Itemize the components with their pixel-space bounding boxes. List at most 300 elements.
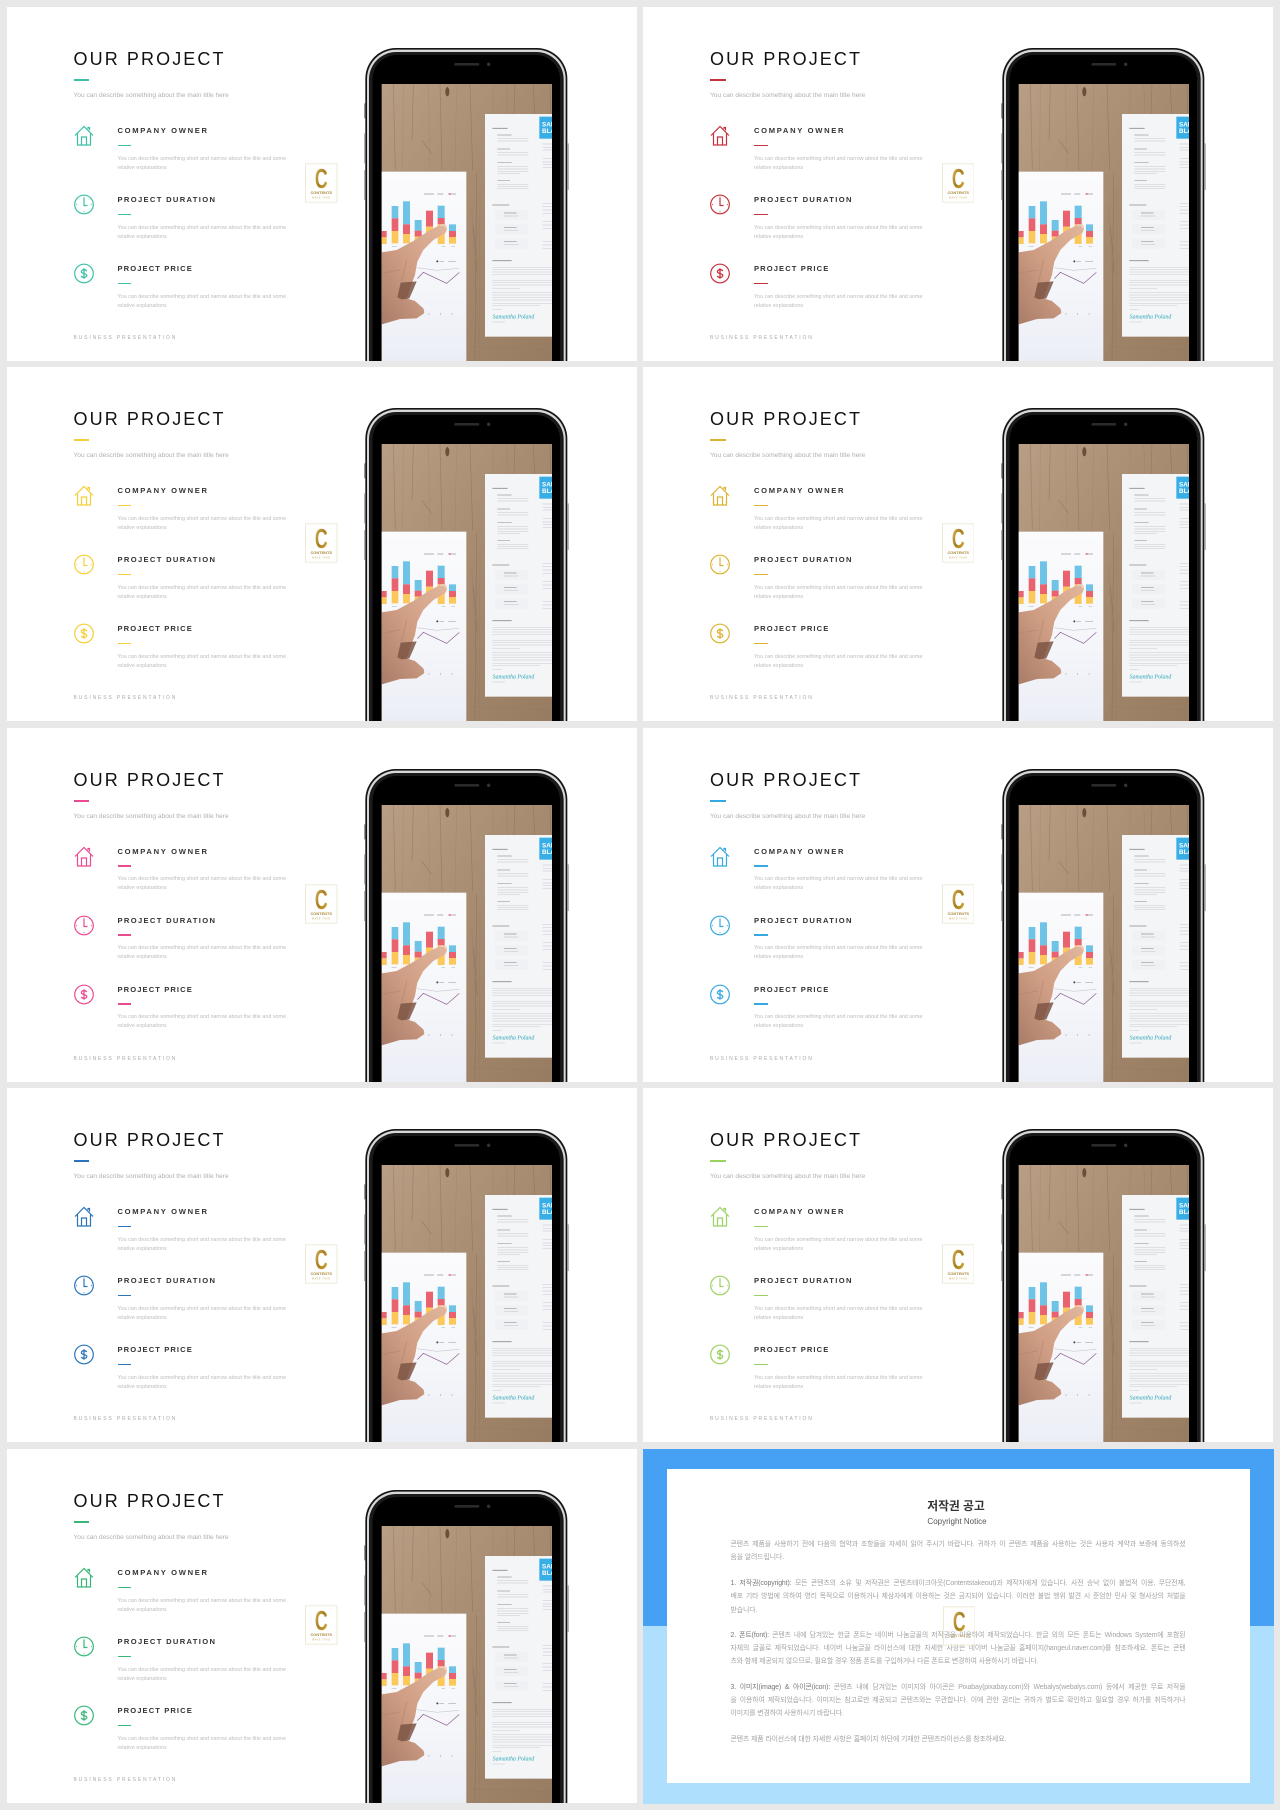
panel: sky blue slide [643,728,1273,1082]
description: You can describe something short and narrow about the title and some [118,224,286,230]
footer label: BUSINESS PRESENTATION [74,695,177,701]
description: You can describe something short and narrow about the title and some [118,1374,286,1380]
logo: C [951,1244,964,1275]
phone with photo: BLA [1178,488,1192,495]
underline [118,144,131,146]
notice title: 저작권 공고 [927,1499,985,1513]
underline [118,1586,131,1588]
logo: CONTENTS [310,1632,332,1637]
logo: CONTENTS [310,550,332,555]
description: relative explanations [754,165,803,171]
underline [118,1294,131,1296]
description: You can describe something short and narrow about the title and some [118,945,286,951]
footer label: BUSINESS PRESENTATION [710,695,814,701]
description: relative explanations [118,885,167,891]
heading: COMPANY OWNER [118,1568,209,1577]
icon: house [710,846,730,866]
icon: house [710,485,730,506]
phone with photo: Samantha Poland [1129,1395,1171,1401]
description: relative explanations [118,594,167,600]
description [118,1374,286,1392]
heading: PROJECT DURATION [118,195,216,204]
underline [118,1364,131,1365]
description: You can describe something short and narrow about the title and some [754,876,923,882]
phone with photo [996,40,1216,361]
icon: clock [74,1636,94,1657]
phone with photo: SAM [1178,481,1193,488]
description: relative explanations [118,303,167,309]
logo: C [315,1244,328,1275]
underline [118,504,131,506]
logo: C [315,523,328,554]
logo: CONTENTS [947,550,969,555]
phone with photo: BLA [542,128,555,135]
subtitle: You can describe something about the main title here [74,92,229,99]
description: You can describe something short and narrow about the title and some [754,945,923,951]
underline [754,1226,768,1227]
item: company owner [74,485,298,545]
section 3: image and icon: 3. 이미지(image) & 아이콘(icon): 콘텐츠 내에 담겨있는 이미지와 아이콘은 Pixabay(pixabay.com)와 Webalys(webalys.com) 등에서 제공한 무료 저작물 [730,1684,1186,1691]
underline [118,934,131,936]
logo: MAKE TAKE [312,1638,331,1641]
description [118,875,286,893]
title: OUR PROJECT [74,409,226,429]
underline [118,642,131,644]
phone with photo: BLA [1178,1209,1192,1216]
heading: COMPANY OWNER [118,486,209,495]
accent bar [710,1160,726,1162]
icon: clock [74,1275,94,1296]
accent bar [710,439,726,441]
description: You can describe something short and narrow about the title and some [118,1598,286,1604]
heading: PROJECT PRICE [118,1706,193,1715]
description [754,224,923,242]
heading: COMPANY OWNER [754,126,845,135]
footer label: BUSINESS PRESENTATION [74,1777,177,1783]
description: You can describe something short and narrow about the title and some [118,584,286,590]
heading: PROJECT DURATION [118,1276,216,1285]
description: You can describe something short and narrow about the title and some [118,654,286,660]
description [118,154,286,173]
icon: house [74,1206,94,1227]
item: project price [74,1705,298,1765]
logo [942,523,974,563]
description [754,652,923,671]
description: relative explanations [754,663,803,669]
phone with photo: BLA [542,1570,555,1577]
underline [754,1003,768,1004]
heading: COMPANY OWNER [754,1207,845,1216]
underline [118,214,131,215]
description [118,652,286,671]
description [118,1596,286,1615]
description: You can describe something short and narrow about the title and some [754,294,923,300]
logo [305,523,338,563]
logo: C [315,1605,328,1636]
description: relative explanations [754,594,803,600]
description: You can describe something short and narrow about the title and some [754,1236,923,1242]
description: You can describe something short and narrow about the title and some [118,876,286,882]
icon: dollar coin [74,263,94,284]
panel: navy blue slide [6,1088,636,1442]
item: company owner [74,1206,298,1266]
panel: red slide [643,7,1273,361]
description [754,1304,923,1323]
description: relative explanations [754,1246,803,1252]
underline [118,865,131,866]
description: You can describe something short and narrow about the title and some [118,1736,286,1742]
heading: PROJECT DURATION [754,195,853,204]
panel: copyright notice [643,1449,1274,1804]
description: relative explanations [118,525,167,531]
description [118,514,286,533]
icon: house [710,125,730,146]
item: company owner [710,485,935,545]
description: You can describe something short and narrow about the title and some [754,1306,923,1312]
phone with photo: Samantha Poland [493,1756,534,1762]
description: You can describe something short and narrow about the title and some [118,156,286,162]
accent bar [74,1521,89,1523]
description [754,1236,923,1254]
phone with photo [996,760,1216,1082]
footer label: BUSINESS PRESENTATION [710,1056,814,1062]
panel: green slide [6,1449,636,1803]
underline [754,504,768,506]
icon: clock [710,194,730,215]
subtitle: You can describe something about the main title here [710,452,865,459]
phone with photo: BLA [542,848,555,856]
logo [942,163,974,203]
logo: MAKE TAKE [948,556,967,559]
phone with photo: SAM [1178,842,1193,849]
title: OUR PROJECT [74,49,226,69]
closing line: 콘텐츠 제품 라이선스에 대한 자세한 사항은 홈페이지 하단에 기재한 콘텐츠라이선스를 참조하세요. [730,1736,1006,1743]
description: You can describe something short and narrow about the title and some [118,294,286,300]
icon: dollar coin [710,263,730,284]
heading: COMPANY OWNER [754,486,845,495]
heading: PROJECT PRICE [118,264,193,273]
item: project duration [710,914,935,974]
heading: COMPANY OWNER [118,847,209,856]
section 1: copyright: 1. 저작권(copyright): 모든 콘텐츠의 소유 및 저작권은 콘텐츠테이크아웃(Contentstakeout)과 제작자에게 있습니다. 사전 승낙 없이 불법적 이용, 무단전재, [730,1580,1186,1587]
item: project duration [74,914,298,974]
description: relative explanations [118,1246,167,1252]
description: You can describe something short and narrow about the title and some [118,1306,286,1312]
description: You can describe something short and narrow about the title and some [754,1374,923,1380]
description [118,1236,286,1254]
underline [754,642,768,644]
panel: gold slide [643,367,1273,721]
icon: clock [74,194,94,215]
item: project duration [74,1636,298,1696]
description: relative explanations [118,1745,167,1751]
item: project duration [710,1275,935,1335]
accent bar [74,439,89,441]
section 3: image and icon: 을 이용하여 제작되었습니다. 이미지는 참고로만 제공되고 콘텐츠와는 무관합니다. 이에 관한 권리는 귀하가 별도로 확인하고 필요할 경우 허가를 취득하거나 [730,1697,1186,1704]
subtitle: You can describe something about the main title here [710,812,865,820]
underline [118,1656,131,1657]
heading: COMPANY OWNER [118,126,209,135]
description: You can describe something short and narrow about the title and some [118,1014,286,1020]
underline [754,214,768,215]
phone with photo: BLA [1178,128,1192,135]
item: company owner [74,846,298,906]
logo [942,884,974,924]
footer label: BUSINESS PRESENTATION [710,335,814,341]
item: project price [74,623,298,683]
icon: clock [74,554,94,575]
panel: teal slide [6,7,636,361]
phone with photo: SAM [1178,121,1193,128]
description: relative explanations [754,1315,803,1321]
heading: PROJECT DURATION [754,916,853,925]
description: relative explanations [754,303,803,309]
item: project duration [74,1275,298,1335]
logo: C [952,1606,965,1637]
description: relative explanations [754,234,803,240]
icon: clock [710,554,730,575]
phone with photo: Samantha Poland [493,1395,534,1401]
description: relative explanations [118,1676,167,1682]
description: relative explanations [118,1384,167,1390]
section 3: image and icon [666,1469,1250,1724]
logo: CONTENTS [310,190,332,195]
phone with photo: Samantha Poland [493,674,534,680]
logo [942,1606,975,1646]
footer label: BUSINESS PRESENTATION [74,1416,177,1422]
accent bar [74,1160,89,1162]
item: project price [710,984,935,1044]
panel: pink slide [6,728,636,1082]
intro paragraph [666,1469,1250,1559]
phone with photo: Samantha Poland [1129,314,1171,320]
subtitle: You can describe something about the main title here [710,1173,865,1180]
phone with photo: BLA [1178,848,1192,856]
item: company owner [710,846,935,906]
title: OUR PROJECT [74,770,226,790]
description: You can describe something short and narrow about the title and some [754,1014,923,1020]
item: project duration [710,194,935,254]
icon: clock [710,914,730,936]
underline [118,574,131,575]
heading: COMPANY OWNER [118,1207,209,1216]
icon: house [74,1567,94,1588]
description [754,875,923,893]
phone with photo [360,1482,580,1803]
section 1: copyright: 배포 기타 방법에 의하여 영리 목적으로 이용하거나 제삼자에게 이용하는 것은 금지되어 있습니다. 이러한 불법 행위 발견 시 준엄한 민사 및 형사상의 처벌을 [730,1593,1186,1600]
item: project price [710,623,935,683]
phone with photo: SAM [542,1202,556,1209]
underline [754,1364,768,1365]
icon: house [74,125,94,146]
description: relative explanations [118,165,167,171]
heading: PROJECT PRICE [754,985,829,994]
item: company owner [710,1206,935,1266]
footer label: BUSINESS PRESENTATION [710,1416,814,1422]
underline [754,865,768,866]
logo: CONTENTS [947,910,969,915]
panel: yellow slide [6,367,636,721]
phone with photo: SAM [542,121,556,128]
icon: clock [74,914,94,936]
item: project price [710,263,935,323]
section 1: copyright [666,1469,1250,1619]
phone with photo [360,400,580,721]
title: OUR PROJECT [710,49,862,69]
logo: MAKE TAKE [312,917,331,920]
title: OUR PROJECT [74,1491,226,1511]
logo: MAKE TAKE [948,1277,967,1280]
accent bar [710,79,726,81]
intro paragraph: 음을 알려드립니다. [730,1554,784,1561]
item: project price [74,263,298,323]
icon: dollar coin [710,623,730,644]
icon: clock [710,1275,730,1296]
phone with photo [996,1121,1216,1442]
underline [118,282,131,284]
heading: PROJECT DURATION [118,1637,216,1646]
description [118,1013,286,1031]
description: You can describe something short and narrow about the title and some [754,156,923,162]
underline [754,574,768,575]
icon: house [74,485,94,506]
phone with photo [996,400,1216,721]
logo: CONTENTS [948,1633,970,1638]
heading: PROJECT PRICE [754,624,829,633]
subtitle: You can describe something about the main title here [74,1173,229,1180]
logo: C [951,163,964,194]
underline [118,1724,131,1726]
notice card [666,1469,1250,1783]
description: relative explanations [118,954,167,960]
description: You can describe something short and narrow about the title and some [754,584,923,590]
accent bar [74,800,89,802]
description [118,1666,286,1684]
heading: PROJECT PRICE [118,1345,193,1354]
accent bar [710,800,726,802]
notice subtitle: Copyright Notice [927,1516,987,1526]
subtitle: You can describe something about the main title here [74,452,229,459]
heading: COMPANY OWNER [754,847,845,856]
logo: CONTENTS [947,190,969,195]
heading: PROJECT PRICE [754,1345,829,1354]
logo: MAKE TAKE [312,196,331,199]
description: You can describe something short and narrow about the title and some [754,224,923,230]
logo: CONTENTS [310,910,332,915]
description [754,154,923,173]
phone with photo: Samantha Poland [493,314,534,320]
footer label: BUSINESS PRESENTATION [74,335,177,341]
section 2: font: 츠와 함께 제공되지 않으므로, 필요할 경우 정품 폰트를 구입하거나 다른 폰트로 변경하여 사용하시기 바랍니다. [730,1658,1038,1665]
item: project price [74,984,298,1044]
description: relative explanations [754,954,803,960]
icon: dollar coin [74,1705,94,1726]
logo [305,1244,338,1284]
heading: PROJECT PRICE [754,264,829,273]
description: You can describe something short and narrow about the title and some [754,516,923,522]
heading: PROJECT PRICE [118,985,193,994]
description: relative explanations [118,1023,167,1029]
item: project duration [74,554,298,614]
underline [754,282,768,284]
phone with photo: SAM [542,842,556,849]
logo [305,1605,338,1645]
description: You can describe something short and narrow about the title and some [118,516,286,522]
subtitle: You can describe something about the main title here [74,812,229,820]
heading: PROJECT DURATION [118,555,216,564]
icon: dollar coin [74,984,94,1004]
phone with photo: BLA [542,488,555,495]
section 2: font [666,1469,1250,1674]
item: project duration [74,194,298,254]
description: relative explanations [754,525,803,531]
logo: MAKE TAKE [948,196,967,199]
logo: MAKE TAKE [312,556,331,559]
intro paragraph: 콘텐츠 제품을 사용하기 전에 다음의 협약과 조항들을 자세히 읽어 주시기 바랍니다. 귀하가 이 콘텐츠 제품을 사용하는 것은 사용자 계약과 보증에 동의하셨 [730,1541,1186,1548]
logo: MAKE TAKE [312,1277,331,1280]
phone with photo: Samantha Poland [1129,1035,1171,1041]
description [754,584,923,602]
section 2: font: 자체의 글꼴로 제작되었습니다. 네이버 나눔글꼴 라이선스에 대한 자세한 사항은 네이버 나눔글꼴 홈페이지(hangeul.naver.com)를 참조하세요. 폰트는 콘텐 [730,1645,1186,1652]
icon: dollar coin [710,984,730,1004]
phone with photo: SAM [1178,1202,1193,1209]
phone with photo: Samantha Poland [493,1035,534,1041]
icon: dollar coin [710,1344,730,1365]
description [118,1734,286,1753]
icon: dollar coin [74,623,94,644]
description [754,944,923,962]
logo: C [315,163,328,194]
item: project duration [710,554,935,614]
icon: house [74,846,94,866]
phone with photo: Samantha Poland [1129,674,1171,680]
section 2: font: 2. 폰트(font): 콘텐츠 내에 담겨있는 한글 폰트는 네이버 나눔글꼴의 저작권을 이용하여 제작되었습니다. 한글 외의 모든 폰트는 Windows System에 포함된 [730,1632,1186,1639]
logo: C [951,523,964,554]
icon: dollar coin [74,1344,94,1365]
phone with photo [360,40,580,361]
description [754,1374,923,1392]
logo [305,884,338,924]
logo: CONTENTS [947,1271,969,1276]
underline [754,934,768,936]
title: OUR PROJECT [710,409,862,429]
description: relative explanations [754,885,803,891]
logo: C [315,884,328,914]
description: relative explanations [118,1607,167,1613]
underline [754,144,768,146]
heading: PROJECT DURATION [118,916,216,925]
description [118,224,286,242]
logo: MAKE TAKE [948,917,967,920]
description [118,584,286,602]
footer label: BUSINESS PRESENTATION [74,1056,177,1062]
description: You can describe something short and narrow about the title and some [118,1666,286,1672]
accent bar [74,79,89,81]
underline [118,1003,131,1004]
title: OUR PROJECT [710,770,862,790]
description: relative explanations [754,1384,803,1390]
subtitle: You can describe something about the main title here [74,1534,229,1541]
phone with photo: SAM [542,481,556,488]
title: OUR PROJECT [710,1130,862,1150]
phone with photo: SAM [542,1563,556,1570]
logo: C [951,884,964,914]
description: relative explanations [118,234,167,240]
item: company owner [710,125,935,185]
description: relative explanations [754,1023,803,1029]
panel: lime slide [643,1088,1273,1442]
description [754,514,923,533]
